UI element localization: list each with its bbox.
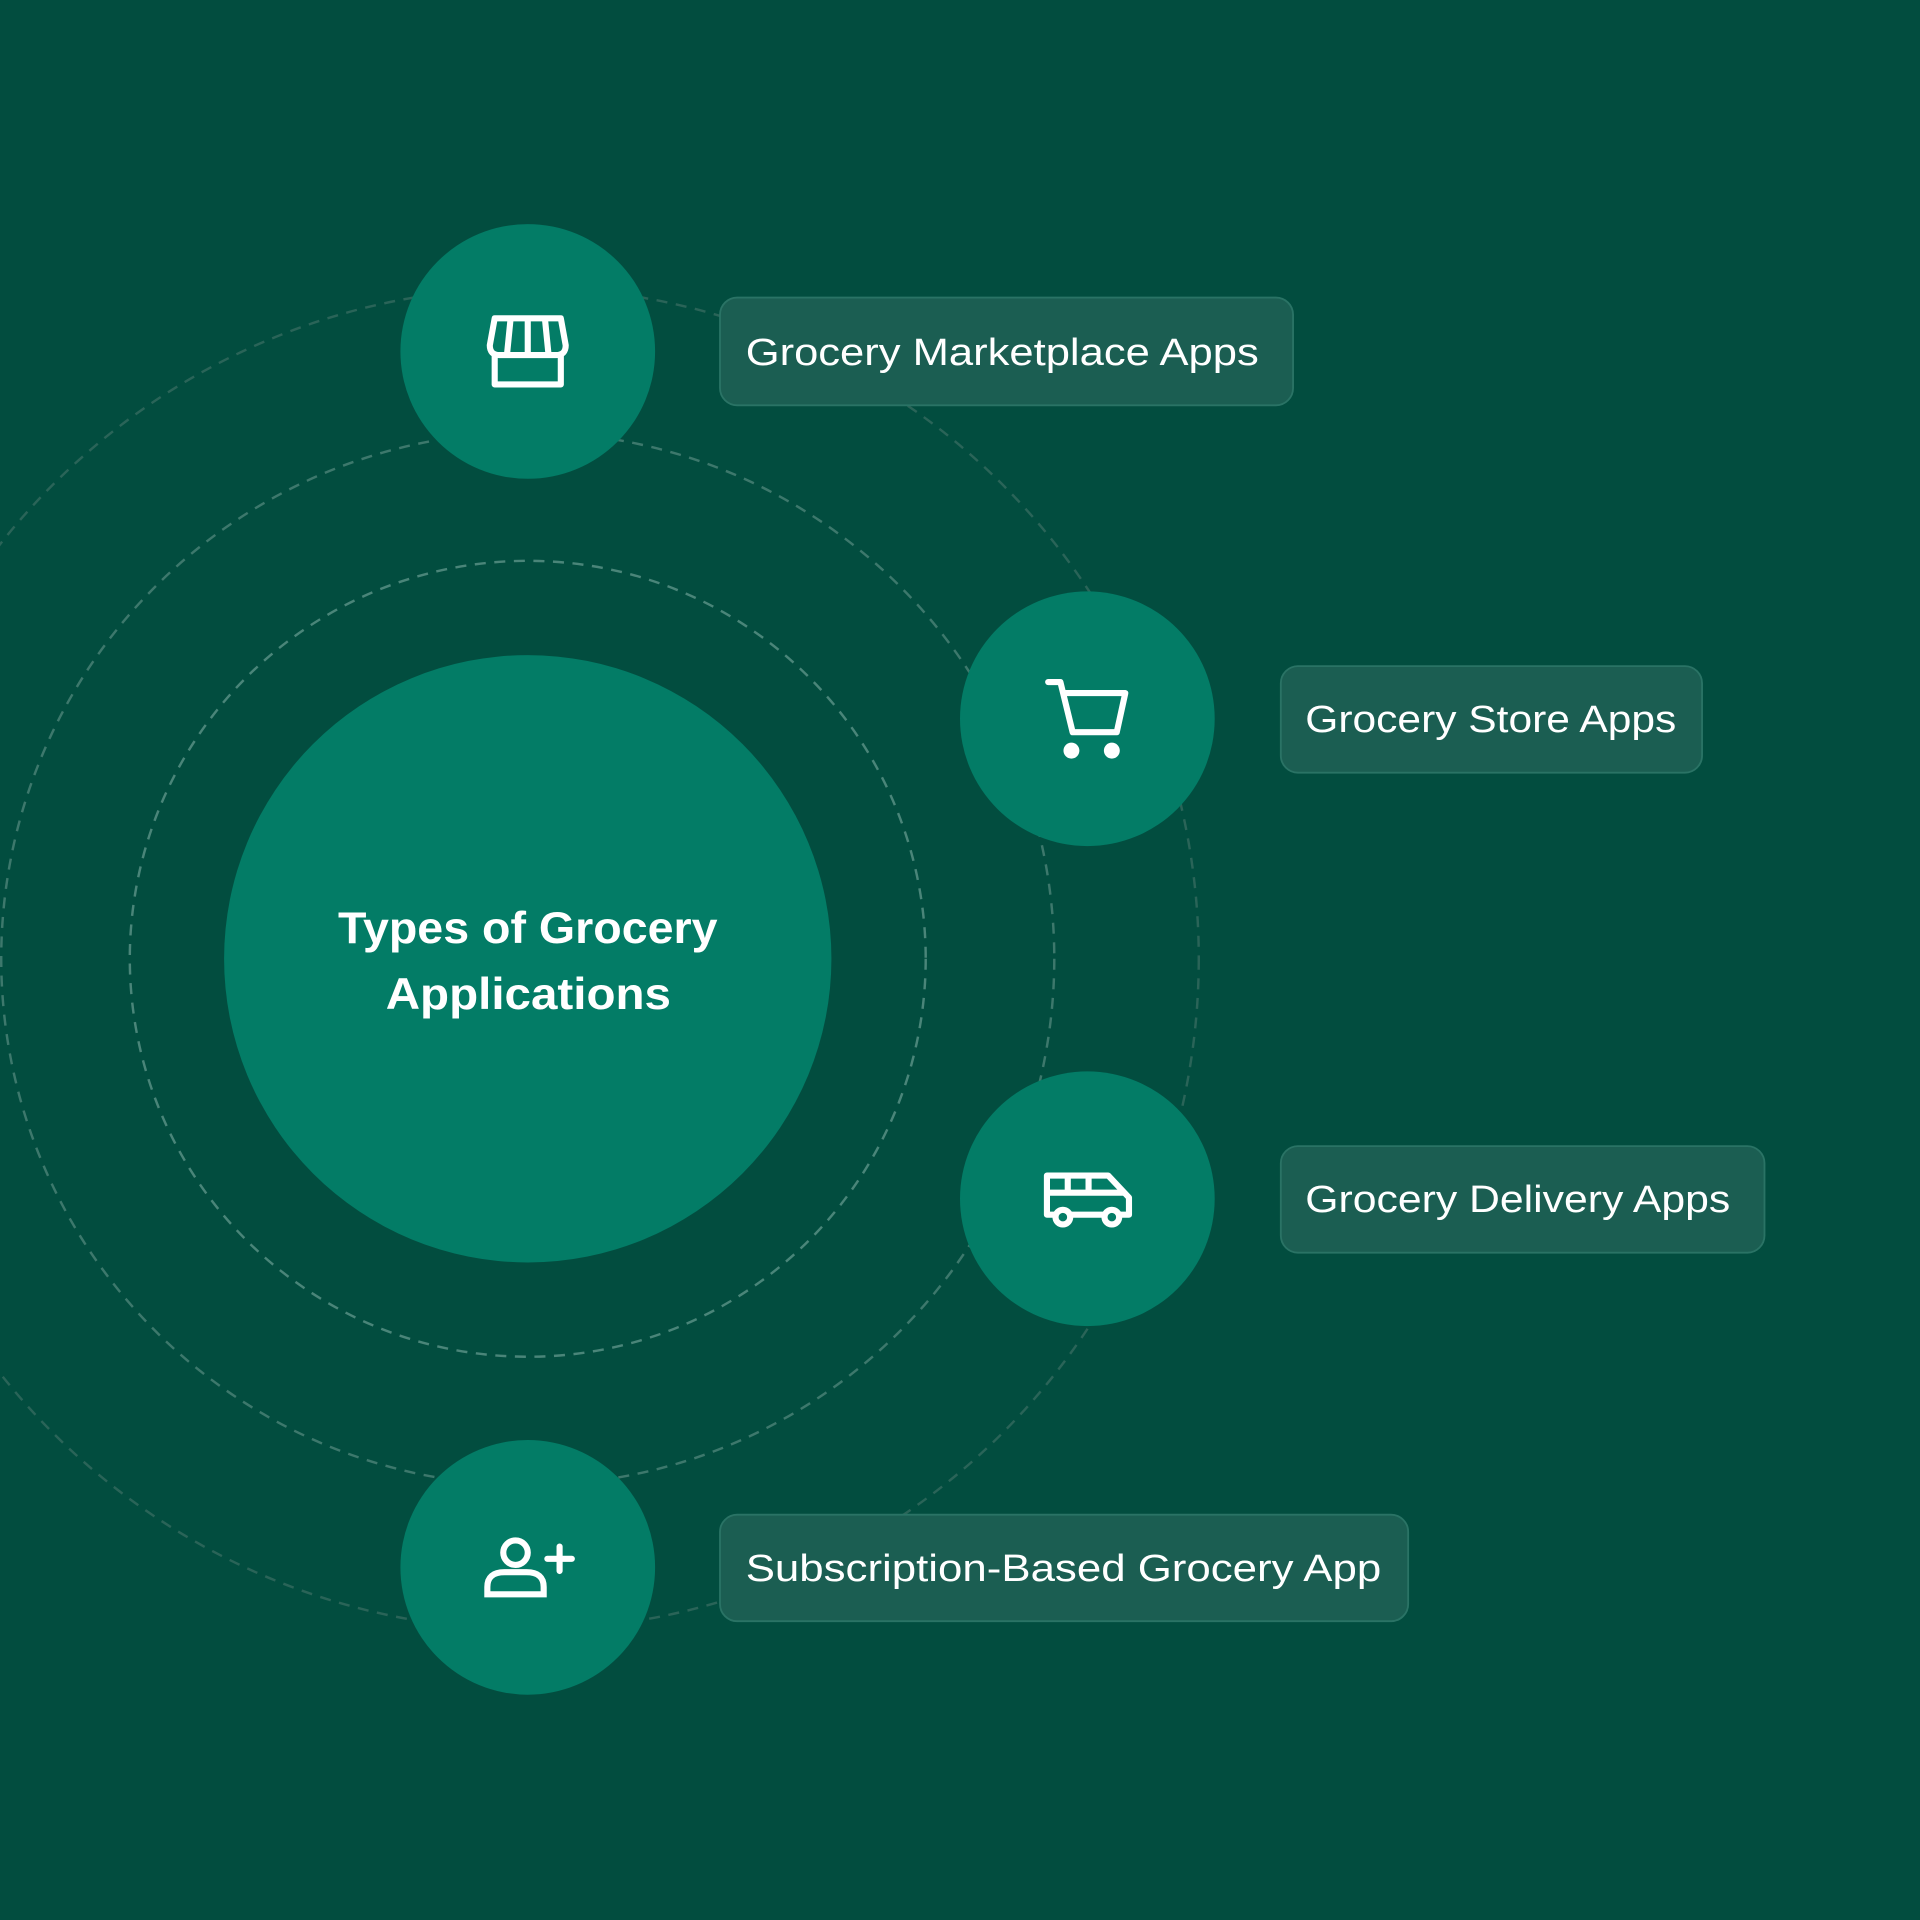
- label: marketplace: Grocery Marketplace Apps: [746, 332, 1259, 374]
- label: delivery: Grocery Delivery Apps: [1305, 1179, 1730, 1221]
- node: store: [960, 591, 1215, 846]
- icon: add user: [487, 1540, 572, 1594]
- center circle: title: Applications: [386, 970, 671, 1019]
- label: store: Grocery Store Apps: [1305, 699, 1676, 741]
- label: store: [1281, 666, 1702, 773]
- node: delivery: [960, 1071, 1215, 1326]
- label: marketplace: [720, 298, 1293, 405]
- label: delivery: [1281, 1146, 1764, 1253]
- center circle: title: [224, 655, 831, 1262]
- center circle: title: Types of Grocery: [338, 904, 718, 953]
- icon: van: [1047, 1176, 1129, 1224]
- label: subscription: Subscription-Based Grocery App: [746, 1548, 1381, 1590]
- node: subscription: [400, 1440, 655, 1695]
- label: subscription: [720, 1515, 1408, 1621]
- icon: store: [490, 318, 566, 384]
- node: marketplace: [400, 224, 655, 479]
- icon: cart: [1048, 682, 1125, 756]
